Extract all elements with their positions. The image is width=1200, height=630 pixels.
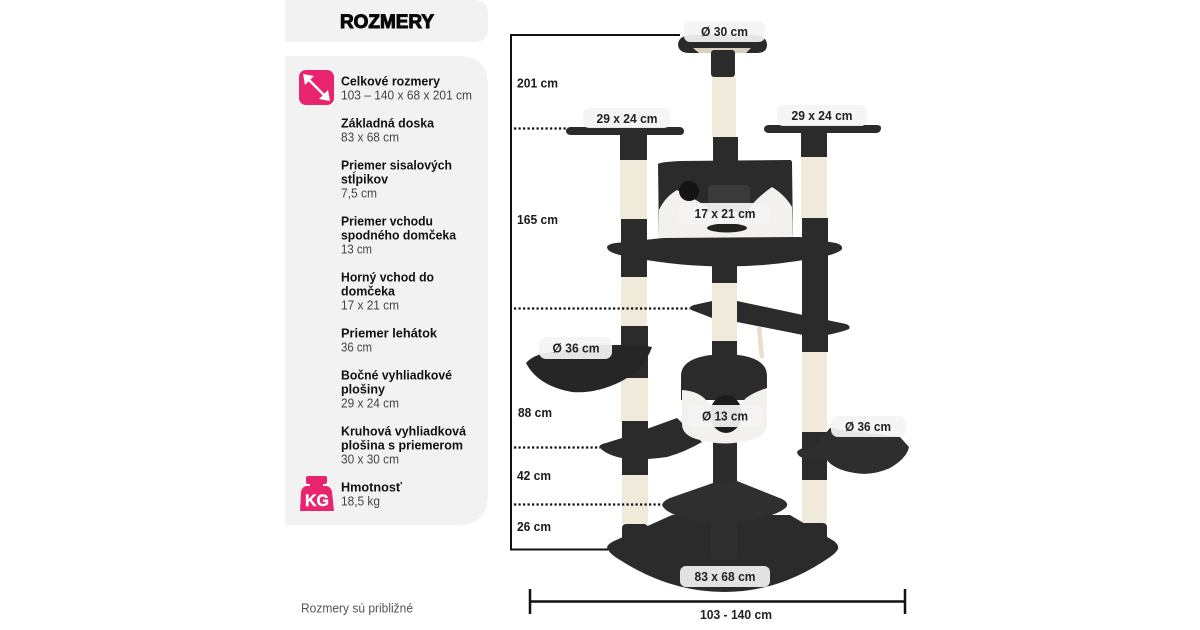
spec: lower house entrance: spodného domčeka [341, 228, 457, 242]
base center post [711, 520, 737, 560]
spec: lower house entrance [341, 214, 457, 256]
label pill: left hammock diameter [539, 337, 612, 359]
upper entrance [708, 185, 750, 212]
label pill: lower entrance diameter: Ø 13 cm [702, 408, 748, 424]
icon: overall dimensions arrow [299, 70, 334, 105]
height labels [517, 76, 558, 534]
height labels: 42 cm [517, 468, 551, 483]
base platform [607, 515, 838, 592]
spec: round platform [341, 424, 467, 466]
right hammock [797, 428, 909, 474]
label pill: left platform size [583, 108, 670, 128]
label pill: base size [680, 566, 770, 587]
spec: hammock diameter: 36 cm [341, 340, 372, 354]
spec: round platform: plošina s priemerom [341, 438, 463, 452]
top post segment [711, 50, 735, 77]
height labels: 88 cm [518, 405, 552, 420]
lower left shelf [599, 418, 702, 459]
label pill: left platform size: 29 x 24 cm [596, 111, 658, 126]
spec: base board: Základná doska [341, 116, 435, 130]
lower corner platform [662, 481, 787, 523]
large corner platform [607, 237, 842, 266]
spec: upper house entrance: 17 x 21 cm [341, 298, 399, 312]
spec: weight: Hmotnosť [341, 480, 403, 494]
label pill: base size: 83 x 68 cm [694, 569, 756, 584]
height measuring lines [511, 35, 690, 550]
spec: upper house entrance [341, 270, 434, 312]
label pill: right hammock diameter [831, 416, 906, 437]
rope toy [759, 327, 762, 358]
height labels: 201 cm [517, 76, 558, 90]
spec: base board: 83 x 68 cm [341, 130, 399, 144]
label pill: left hammock diameter: Ø 36 cm [552, 340, 600, 356]
title: ROZMERY [340, 12, 434, 33]
width dimension arrow [530, 589, 905, 614]
spec: lower house entrance: Priemer vchodu [341, 214, 433, 228]
spec: sisal post diameter: 7,5 cm [341, 186, 377, 200]
spec: side platforms: Bočné vyhliadkové [341, 368, 452, 382]
spec: round platform: 30 x 30 cm [341, 452, 399, 466]
icon: weight KG: KG [305, 491, 329, 510]
left hammock [526, 345, 652, 392]
spec: overall dimensions [341, 74, 472, 102]
cat tree illustration [526, 35, 909, 592]
right side platform [764, 125, 881, 133]
entrance lower edge [707, 224, 747, 232]
label pill: upper entrance size: 17 x 21 cm [694, 206, 756, 221]
lower house entrance [710, 395, 742, 433]
label pill: upper entrance size [679, 203, 770, 224]
center post [712, 77, 738, 490]
spec: base board [341, 116, 435, 144]
spec: weight: 18,5 kg [341, 494, 380, 508]
left post [620, 133, 648, 549]
upper house [658, 160, 793, 240]
lower house [681, 354, 767, 444]
spec: weight [341, 480, 403, 508]
lower left shelf post [622, 425, 648, 455]
label pill: right hammock diameter: Ø 36 cm [845, 419, 891, 434]
spec: sisal post diameter: Priemer sisalových [341, 158, 452, 172]
toy ball [679, 181, 699, 201]
spec: overall dimensions: 103 – 140 x 68 x 201 cm [341, 88, 472, 102]
spec: lower house entrance: 13 cm [341, 242, 372, 256]
spec: side platforms [341, 368, 452, 410]
footnote: Rozmery sú približné [301, 600, 413, 616]
height labels: 165 cm [517, 212, 558, 227]
panel: dimensions list [285, 56, 488, 525]
spec: hammock diameter: Priemer lehátok [341, 326, 438, 340]
spec: upper house entrance: Horný vchod do [341, 270, 434, 284]
top platform sisal edge [693, 48, 751, 53]
spec: side platforms: 29 x 24 cm [341, 396, 399, 410]
top round platform [678, 35, 767, 53]
width label: 103 - 140 cm [700, 607, 772, 622]
label pill: right platform size [777, 105, 867, 126]
spec: side platforms: plošiny [341, 382, 386, 396]
spec: overall dimensions: Celkové rozmery [341, 74, 441, 88]
left side platform [566, 127, 684, 135]
right post [801, 131, 828, 549]
label pill: right platform size: 29 x 24 cm [792, 108, 852, 123]
spec: upper house entrance: domčeka [341, 284, 396, 298]
icon: weight KG [300, 476, 334, 511]
spec: hammock diameter [341, 326, 438, 354]
heading panel [285, 0, 488, 42]
label pill: top platform diameter: Ø 30 cm [701, 24, 748, 39]
spec: sisal post diameter: stĺpikov [341, 172, 389, 186]
label pill: lower entrance diameter [687, 405, 762, 427]
mid shelf [690, 301, 850, 335]
label pill: top platform diameter [684, 21, 765, 42]
spec: sisal post diameter [341, 158, 452, 200]
spec: round platform: Kruhová vyhliadková [341, 424, 467, 438]
height labels: 26 cm [517, 519, 551, 534]
